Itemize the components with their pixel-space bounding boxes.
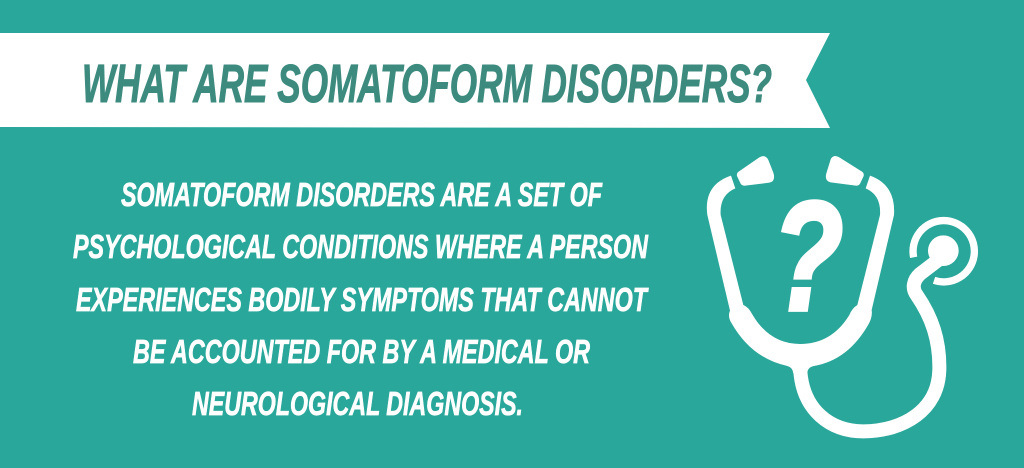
icon: stethoscope with question mark xyxy=(707,156,974,431)
question mark: ? xyxy=(773,170,843,343)
body paragraph: NEUROLOGICAL DIAGNOSIS. xyxy=(192,385,523,422)
right earpiece xyxy=(826,156,864,186)
chest piece xyxy=(928,235,959,266)
body paragraph xyxy=(73,176,649,422)
left earpiece xyxy=(737,156,774,186)
body paragraph: PSYCHOLOGICAL CONDITIONS WHERE A PERSON xyxy=(73,228,649,265)
chest piece ring xyxy=(913,221,974,282)
body paragraph: SOMATOFORM DISORDERS ARE A SET OF xyxy=(121,176,603,213)
headset tubes and chest yoke xyxy=(707,176,894,373)
rubber tube xyxy=(800,260,939,431)
body paragraph: EXPERIENCES BODILY SYMPTOMS THAT CANNOT xyxy=(76,281,649,318)
ribbon banner xyxy=(0,33,830,128)
body paragraph: BE ACCOUNTED FOR BY A MEDICAL OR xyxy=(133,333,590,370)
